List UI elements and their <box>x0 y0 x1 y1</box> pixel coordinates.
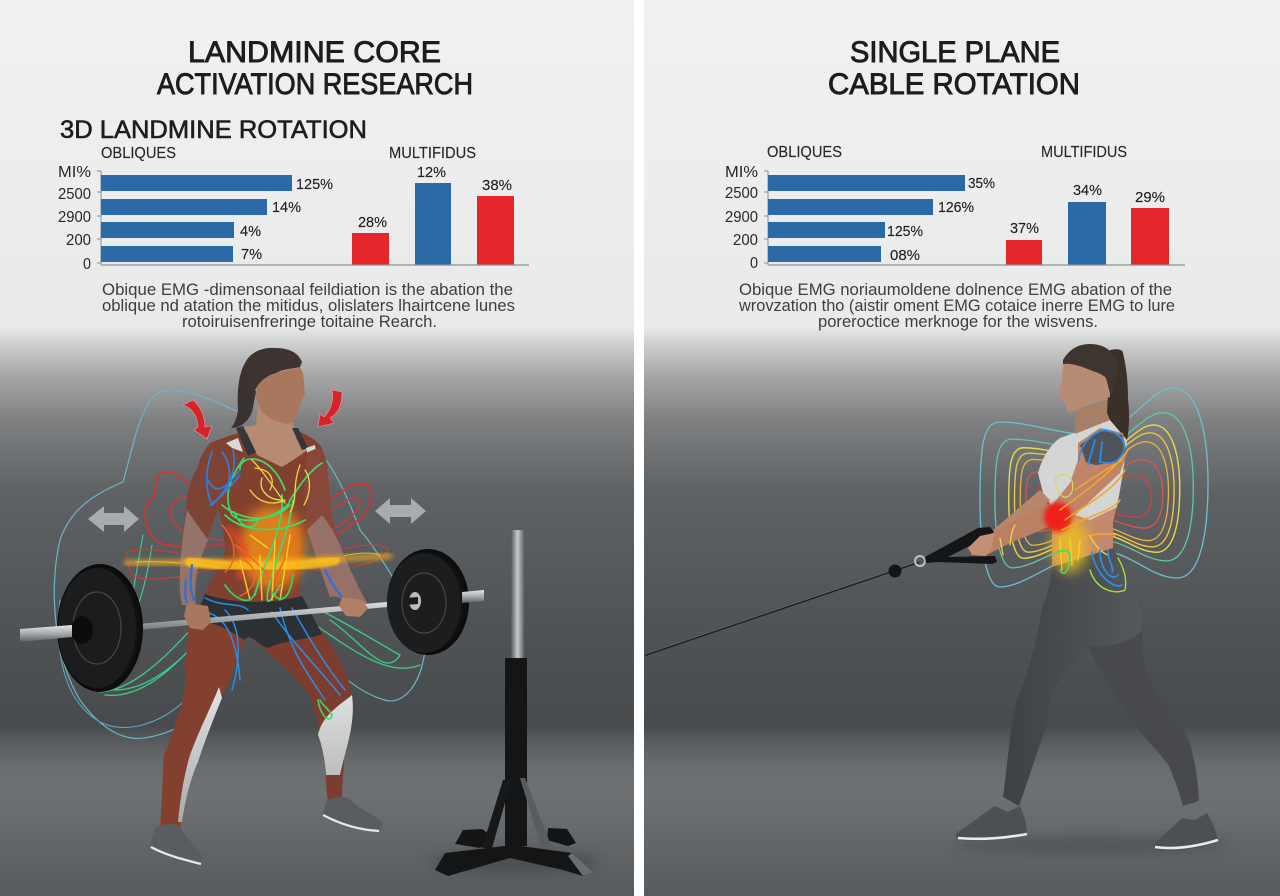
figure part: right arm <box>305 447 367 606</box>
figure part: upper arm <box>1048 428 1127 517</box>
bar chart: obliques: MI% <box>58 164 91 181</box>
figure part: torso <box>205 424 328 602</box>
figure part: far forearm <box>993 490 1050 545</box>
figure part: hands on bar <box>184 597 368 630</box>
bar chart: obliques: 200 <box>733 232 758 249</box>
title: single plane cable rotation <box>828 36 1080 101</box>
figure part: front shoe sole <box>958 834 1027 839</box>
illustration: landmine stand <box>430 530 600 876</box>
arrow: grey double left <box>88 506 139 532</box>
figure part: left arm <box>180 443 228 606</box>
title: landmine core activation research <box>157 36 473 101</box>
bar chart: multifidus <box>768 144 1185 265</box>
illustration: cable and handle <box>645 527 997 655</box>
figure part: left leg <box>160 610 246 828</box>
figure part: shoulder sleeve <box>1080 430 1126 465</box>
bar chart: multifidus: MULTIFIDUS <box>1041 144 1127 161</box>
panel: cable rotation <box>644 0 1280 896</box>
heading: 3D landmine rotation: 3D LANDMINE ROTATION <box>60 116 367 144</box>
title: single plane cable rotation: SINGLE PLANE <box>850 36 1060 69</box>
figure part: bra straps <box>236 426 308 456</box>
figure part: neck <box>1075 400 1110 434</box>
text block: landmine summary <box>102 280 515 331</box>
title: single plane cable rotation: CABLE ROTATION <box>828 68 1080 101</box>
figure part: ponytail <box>1107 349 1129 440</box>
figure part: hair <box>1063 344 1118 397</box>
bar chart: multifidus <box>101 145 529 265</box>
bar chart: multifidus: 34% <box>1073 182 1102 199</box>
figure part: knee wraps <box>178 687 353 822</box>
icon: left red and yellow wing contours <box>127 472 388 579</box>
text block: landmine summary: Obique EMG -dimensonaal feildiation is the abation the <box>102 280 513 299</box>
bar chart: obliques: 200 <box>66 232 91 249</box>
bar chart: obliques: 126% <box>938 199 974 216</box>
arrow: grey double right <box>375 498 426 524</box>
figure part: shoulder highlight <box>226 438 316 454</box>
bar chart: obliques: 2500 <box>58 186 91 203</box>
figure part: torso skin <box>1052 505 1117 567</box>
bar chart: obliques <box>725 144 995 272</box>
panel: landmine <box>0 0 634 896</box>
bar chart: multifidus: MULTIFIDUS <box>389 145 476 162</box>
figure part: shorts <box>194 594 322 648</box>
figure: landmine athlete <box>150 348 383 866</box>
bar chart: obliques: 2500 <box>725 185 758 202</box>
bar chart: obliques: 7% <box>241 246 262 263</box>
bar chart: multifidus: 12% <box>417 164 446 181</box>
bar chart: obliques: 08% <box>890 247 920 264</box>
figure part: left shoe <box>150 824 203 866</box>
bar chart: multifidus: 38% <box>482 177 512 194</box>
arrow: red curved left <box>183 400 212 439</box>
bar chart: obliques: OBLIQUES <box>101 145 176 162</box>
figure part: right shoe <box>322 797 383 832</box>
figure part: face <box>1058 362 1110 413</box>
text block: cable summary: Obique EMG noriaumoldene dolnence EMG abation of the <box>739 280 1172 299</box>
icon: cable athlete muscle map <box>1000 430 1128 592</box>
figure part: neck and chest <box>237 405 308 467</box>
bar chart: obliques <box>58 145 333 273</box>
bar chart: obliques: 35% <box>968 175 995 192</box>
text block: landmine summary: oblique nd atation the mitidus, olislaters lhairtcene lunes <box>102 296 515 315</box>
figure part: right shoe sole <box>323 815 379 831</box>
figure part: front shoe <box>956 806 1027 841</box>
bar chart: multifidus: 37% <box>1010 220 1039 237</box>
bar chart: obliques: 0 <box>750 255 758 272</box>
figure part: hair <box>245 348 302 392</box>
figure part: back shoe sole <box>1155 840 1218 848</box>
bar chart: obliques: 2900 <box>725 209 758 226</box>
bar chart: multifidus: 29% <box>1135 189 1165 206</box>
figure part: left shoe sole <box>151 847 201 864</box>
figure part: right leg <box>246 606 353 801</box>
title: landmine core activation research: ACTIVATION RESEARCH <box>157 68 473 101</box>
figure part: face <box>256 367 305 424</box>
text block: cable summary: wrovzation tho (aistir oment EMG cotaice inerre EMG to lure <box>738 296 1175 315</box>
bar chart: obliques: 14% <box>272 199 301 216</box>
illustration: barbell <box>20 549 484 692</box>
figure part: near forearm <box>975 503 1073 556</box>
bar chart: obliques: 125% <box>887 223 923 240</box>
bar chart: obliques: 2900 <box>58 209 91 226</box>
figure part: top <box>1038 420 1127 520</box>
arrow: red curved right <box>318 390 342 427</box>
icon: butterfly EMG contours <box>980 388 1208 587</box>
figure part: right forearm overlay <box>307 515 367 606</box>
text block: cable summary <box>738 280 1175 331</box>
bar chart: obliques: MI% <box>725 164 758 181</box>
text block: cable summary: poreroctice merknoge for the wisvens. <box>818 312 1098 331</box>
icon: muscle activation map <box>127 450 389 719</box>
bar chart: obliques: 125% <box>296 176 333 193</box>
icon: left energy contours behind figure <box>54 391 425 738</box>
text block: landmine summary: rotoiruisenfreringe toitaine Rearch. <box>182 312 437 331</box>
figure part: ponytail <box>231 363 256 428</box>
bar chart: multifidus: 28% <box>358 214 387 231</box>
figure part: hands on handle <box>968 533 994 556</box>
bar chart: obliques: 4% <box>240 223 261 240</box>
figure part: front leg and hips <box>1003 548 1142 806</box>
figure part: back leg <box>1075 590 1199 806</box>
figure part: left forearm overlay <box>180 510 208 606</box>
figure part: back shoe <box>1153 813 1218 851</box>
figure: cable athlete <box>950 344 1230 853</box>
bar chart: obliques: OBLIQUES <box>767 144 842 161</box>
bar chart: obliques: 0 <box>83 256 91 273</box>
title: landmine core activation research: LANDMINE CORE <box>188 36 441 69</box>
